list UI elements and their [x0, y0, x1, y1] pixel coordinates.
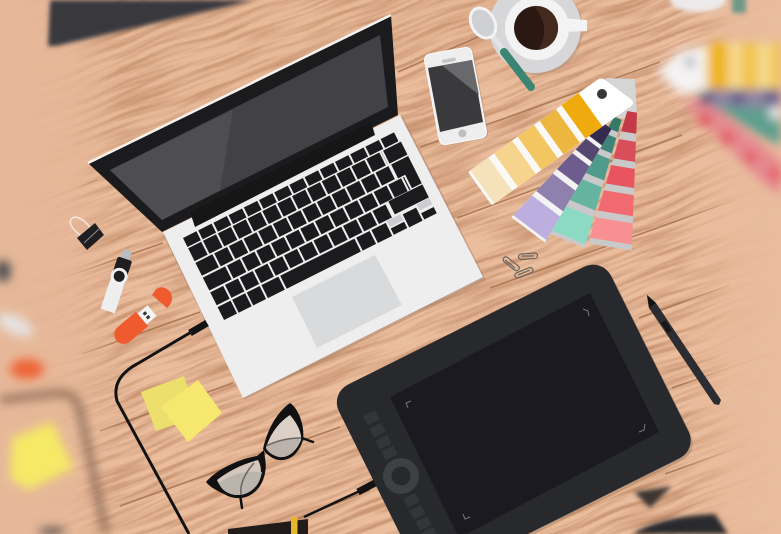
coffee cup	[489, 0, 587, 75]
colour swatch fan	[468, 78, 638, 250]
glasses	[206, 403, 313, 508]
sticky notes	[141, 376, 222, 442]
orange USB cap	[152, 287, 172, 308]
blurred items, left	[0, 260, 106, 534]
laptop display	[110, 35, 388, 220]
purple swatch strip	[512, 124, 612, 242]
laptop base	[163, 117, 486, 400]
red swatch strip	[588, 111, 638, 250]
tablet touch ring	[383, 458, 419, 494]
touchpad	[292, 255, 402, 348]
keyboard	[185, 136, 435, 317]
tablet corner marks	[406, 309, 645, 519]
laptop	[88, 15, 486, 400]
blurred tablet and pen, bottom right	[632, 486, 728, 534]
blurred laptop, top left	[48, 0, 255, 46]
yellow swatch strip	[468, 70, 634, 205]
laptop cable	[116, 323, 207, 534]
notebook	[228, 517, 308, 534]
tablet cable	[304, 483, 375, 517]
stylus pen	[647, 295, 721, 405]
laptop screen lid	[88, 15, 398, 232]
spoon	[465, 3, 531, 87]
graphics tablet	[330, 258, 700, 534]
swatch hole	[597, 89, 607, 99]
teal swatch strip	[550, 117, 622, 248]
tablet express keys	[363, 410, 438, 534]
blurred colour swatches, right	[657, 43, 781, 196]
paper clips	[502, 253, 538, 279]
orange USB drive	[110, 287, 172, 348]
white USB drive	[100, 248, 136, 314]
binder clip	[70, 217, 104, 250]
blurred cup and spoon, top right	[670, 0, 746, 13]
laptop hinge	[190, 122, 375, 227]
swatch back card	[605, 78, 637, 118]
phone	[424, 46, 489, 147]
tablet active area	[390, 293, 659, 534]
